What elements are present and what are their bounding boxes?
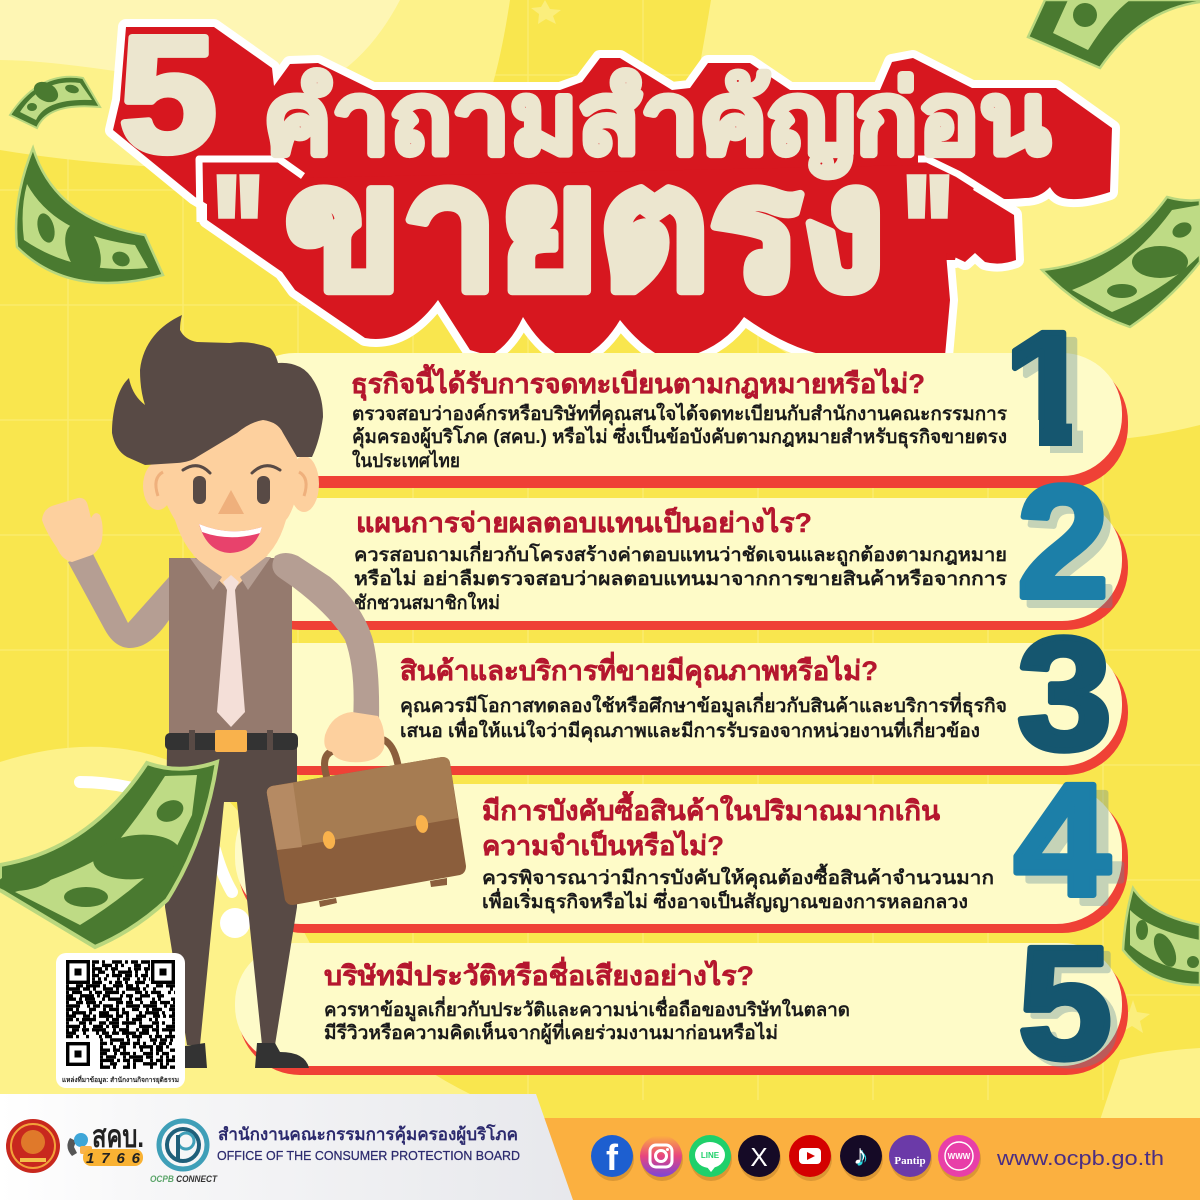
banknote: bottom right: [1123, 888, 1200, 985]
icon: X: X: [750, 1142, 768, 1172]
social icons: [591, 1135, 981, 1181]
text block: question 1: [351, 363, 1008, 472]
hair: [112, 315, 323, 465]
title: 5 คำถามสำคัญก่อน "ขายตรง": [113, 2, 1112, 356]
right arm: [272, 553, 379, 720]
title: red extruded backing: [113, 27, 1112, 356]
icon: line: LINE: [701, 1151, 720, 1160]
icon: facebook: f: [606, 1137, 619, 1178]
mouth: [199, 524, 262, 553]
body 4: [482, 863, 994, 914]
number 3: 3: [1017, 604, 1112, 783]
logo: hotline 1766: [67, 1119, 144, 1167]
body 5: [324, 996, 850, 1045]
QR code card: [56, 953, 185, 1088]
belt: [165, 730, 298, 752]
body 3: คุณควรมีโอกาสทดลองใช้หรือศึกษาข้อมูลเกี่ยวกับสินค้าและบริการที่ธุรกิจ: [400, 692, 1007, 718]
icon: pantip: Pantip: [894, 1155, 926, 1167]
title: line one: คำถามสำคัญก่อน: [263, 63, 1050, 178]
banknote: right: [1042, 197, 1200, 327]
organisation name Thai: สำนักงานคณะกรรมการคุ้มครองผู้บริโภค: [218, 1124, 518, 1146]
number 1: [1012, 330, 1083, 453]
number 5: 5: [1018, 913, 1112, 1092]
shirt: [169, 558, 292, 734]
text block: question 5: [324, 956, 850, 1045]
raised arm: [68, 552, 169, 648]
decorative star right: [1117, 1000, 1150, 1033]
body 2: ควรสอบถามเกี่ยวกับโครงสร้างค่าตอบแทนว่าชัดเจนและถูกต้องตามกฎหมาย: [354, 541, 1007, 567]
icon: instagram: [640, 1135, 683, 1181]
body 5: มีรีวิวหรือความคิดเห็นจากผู้ที่เคยร่วมงานมาก่อนหรือไม่: [324, 1019, 778, 1045]
right shoe: [255, 1043, 309, 1068]
icon: youtube: [789, 1135, 832, 1181]
heading 2: แผนการจ่ายผลตอบแทนเป็นอย่างไร?: [356, 505, 812, 538]
panel: question 1: [235, 353, 1128, 488]
gripping hand: [324, 712, 384, 762]
logo: OCPB: [150, 1121, 218, 1184]
QR code: [66, 962, 175, 1067]
website url: www.ocpb.go.th: [996, 1148, 1164, 1170]
banknote: left: [16, 148, 163, 283]
nose: [218, 490, 244, 514]
footer: orange band: [500, 1118, 1200, 1200]
briefcase body: [267, 757, 466, 905]
heading 3: สินค้าและบริการที่ขายมีคุณภาพหรือไม่?: [400, 651, 878, 688]
text block: question 4: [482, 790, 994, 914]
body 4: ควรพิจารณาว่ามีการบังคับให้คุณต้องซื้อสินค้าจำนวนมาก: [482, 863, 994, 890]
panel: question 3: [235, 643, 1128, 775]
briefcase feet: [319, 878, 447, 907]
panel: question 2: [235, 498, 1128, 630]
body 3: เสนอ เพื่อให้แน่ใจว่ามีคุณภาพและมีการรับรองจากหน่วยงานที่เกี่ยวข้อง: [400, 717, 980, 743]
number 5: 5: [1025, 919, 1119, 1098]
title: numeral 5: 5: [119, 2, 217, 186]
raised hand: [42, 498, 103, 562]
QR caption: แหล่งที่มาข้อมูล: สำนักงานกิจการยุติธรรม: [62, 1074, 179, 1085]
icon: tiktok: [840, 1135, 883, 1181]
body 2: หรือไม่ อย่าลืมตรวจสอบว่าผลตอบแทนมาจากการขายสินค้าหรือจากการ: [354, 567, 1008, 590]
number 4: 4: [1026, 758, 1122, 937]
icon: tiktok: ♪: [855, 1141, 869, 1172]
body 4: เพื่อเริ่มธุรกิจหรือไม่ ซึ่งอาจเป็นสัญญาณของการหลอกลวง: [482, 888, 968, 914]
body 2: [354, 541, 1008, 614]
right ear: [289, 456, 319, 512]
banknote: top left small: [10, 77, 100, 128]
eyes: [193, 476, 270, 504]
footer: organisation panel: [0, 1094, 573, 1200]
number 1: 1: [1015, 305, 1104, 484]
face: [163, 405, 297, 572]
heading 4: [482, 790, 941, 861]
number 1: 1: [1004, 298, 1093, 477]
trousers: [165, 748, 297, 1045]
collar: [190, 557, 271, 590]
heading 5: บริษัทมีประวัติหรือชื่อเสียงอย่างไร?: [324, 956, 754, 991]
tie: [217, 575, 245, 727]
banknote: top right: [1028, 0, 1200, 68]
briefcase handle: [325, 740, 398, 778]
icon: website: WWW: [948, 1152, 971, 1161]
eyebrows: [183, 466, 280, 473]
number 4: 4: [1014, 750, 1110, 929]
title: line two: ขายตรง: [285, 133, 885, 325]
body 1: คุ้มครองผู้บริโภค (สคบ.) หรือไม่ ซึ่งเป็นข้อบังคับตามกฎหมายสำหรับธุรกิจขายตรง: [352, 423, 1007, 449]
icon: facebook: [591, 1135, 634, 1181]
body 1: [352, 400, 1008, 472]
logo: seal: [6, 1119, 60, 1173]
left ear: [143, 462, 173, 510]
clasps: [322, 814, 429, 850]
body 3: [400, 692, 1007, 743]
decorative white streaks: [80, 782, 250, 938]
icon: pantip: [889, 1135, 932, 1181]
number 2: 2: [1024, 460, 1116, 639]
icon: line: [689, 1135, 732, 1181]
body 2: ชักชวนสมาชิกใหม่: [354, 591, 500, 614]
text block: question 3: [400, 651, 1007, 743]
text block: question 2: [354, 505, 1008, 614]
title: closing quote: ": [902, 145, 954, 313]
title: opening quote: ": [212, 145, 264, 313]
illustration: businessman: [42, 315, 379, 1068]
body 1: ในประเทศไทย: [352, 449, 460, 472]
logo: hotline 1766: สคบ.: [92, 1119, 144, 1154]
decorative star top: [531, 0, 561, 24]
logo: OCPB: OCPB CONNECT: [150, 1174, 218, 1184]
left shoe: [185, 1043, 207, 1068]
number 2: 2: [1017, 452, 1109, 631]
icon: tiktok: ♪: [853, 1139, 867, 1170]
heading 4: มีการบังคับซื้อสินค้าในปริมาณมากเกิน: [482, 790, 941, 826]
icon: website: [938, 1135, 981, 1181]
illustration: briefcase: [267, 712, 466, 907]
QR finder patterns: [68, 962, 173, 1064]
neck: [193, 555, 268, 592]
heading 4: ความจำเป็นหรือไม่?: [482, 828, 724, 861]
logo: hotline 1766: 1766: [86, 1150, 141, 1167]
panel: question 4: [235, 784, 1128, 933]
panel: question 5: [235, 943, 1128, 1075]
body 1: ตรวจสอบว่าองค์กรหรือบริษัทที่คุณสนใจได้จดทะเบียนกับสำนักงานคณะกรรมการ: [352, 400, 1008, 426]
icon: X: [738, 1135, 781, 1181]
banknote: large foreground: [0, 762, 217, 947]
body 5: ควรหาข้อมูลเกี่ยวกับประวัติและความน่าเชื่อถือของบริษัทในตลาด: [324, 996, 850, 1022]
organisation name English: OFFICE OF THE CONSUMER PROTECTION BOARD: [217, 1148, 520, 1163]
heading 1: ธุรกิจนี้ได้รับการจดทะเบียนตามกฎหมายหรือไม่?: [351, 363, 925, 401]
